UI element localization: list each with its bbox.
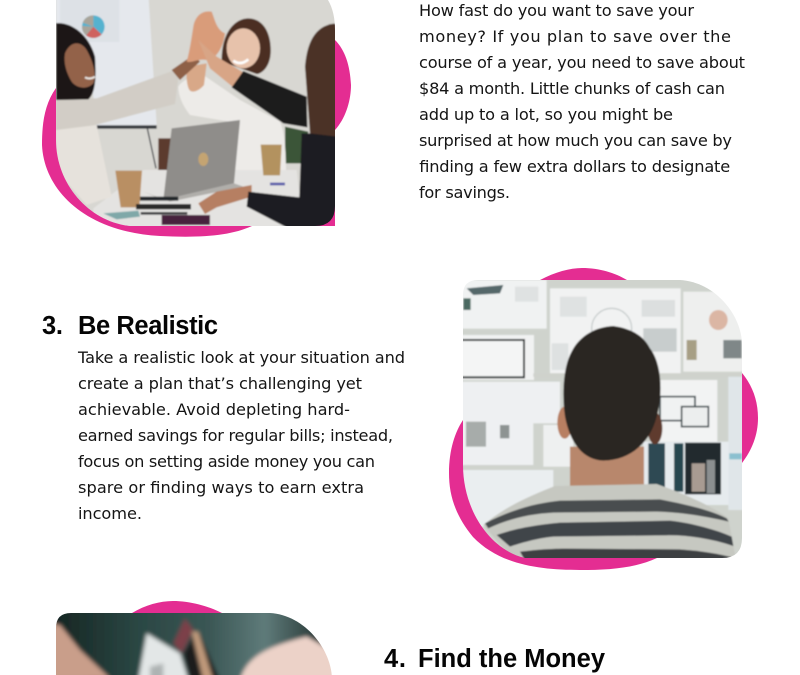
heading: 3. Be Realistic: 3. — [42, 312, 63, 340]
photo: hands opening wallet — [56, 613, 332, 675]
heading: 4. Find the Money: 4. — [384, 645, 406, 673]
panel: step 2 body text: course of a year, you need to save about — [419, 53, 745, 72]
panel: step 4 photo with pink blob — [50, 601, 337, 675]
panel: step 2 body text: How fast do you want to save your — [419, 1, 694, 20]
text block: step 3 body: income. — [78, 504, 142, 523]
pink blob behind team photo — [42, 40, 351, 237]
heading: 3. Be Realistic: Be Realistic — [78, 312, 218, 340]
text block: step 3 body: achievable. Avoid depleting hard- — [78, 400, 350, 419]
sweater stripes — [485, 499, 729, 528]
photo: man facing planning wall — [460, 277, 747, 563]
sweater — [483, 484, 737, 563]
pink blob behind wallet photo — [132, 601, 222, 613]
table — [93, 170, 303, 230]
text block: step 3 body: Take a realistic look at your situation and — [77, 348, 405, 367]
panel: step 3 photo with pink blob — [449, 268, 758, 570]
center woman — [178, 75, 286, 177]
hands — [187, 11, 225, 62]
text block: step 3 body: focus on setting aside money you can — [78, 452, 375, 471]
panel: top photo with pink blob — [42, 0, 351, 237]
laptop — [163, 120, 240, 200]
panel: step 2 body text: finding a few extra dollars to designate — [419, 157, 730, 176]
panel: step 2 body text: $84 a month. Little chunks of cash can — [419, 79, 725, 98]
text block: step 3 body: spare or finding ways to earn extra — [78, 478, 364, 497]
pink blob behind wall photo — [449, 268, 758, 570]
panel: step 2 body text: surprised at how much you can save by — [419, 131, 732, 150]
panel: step 2 body text: for savings. — [419, 183, 510, 202]
text block: step 3 body — [77, 348, 405, 523]
panel: step 2 body text — [419, 1, 745, 202]
panel: step 2 body text: money? If you plan to save over the — [419, 27, 731, 46]
left woman — [56, 71, 178, 133]
text block: step 3 body: create a plan that’s challenging yet — [78, 374, 362, 393]
neck and ears — [557, 407, 572, 439]
right woman — [200, 43, 244, 87]
panel: step 2 body text: add up to a lot, so you might be — [419, 105, 673, 124]
text block: step 3 body: earned savings for regular bills; instead, — [78, 426, 393, 445]
photo: team high five — [50, 0, 343, 233]
head hair — [563, 326, 661, 461]
cups — [115, 171, 142, 207]
markers and pens — [136, 204, 191, 209]
heading: 4. Find the Money: Find the Money — [418, 645, 606, 673]
